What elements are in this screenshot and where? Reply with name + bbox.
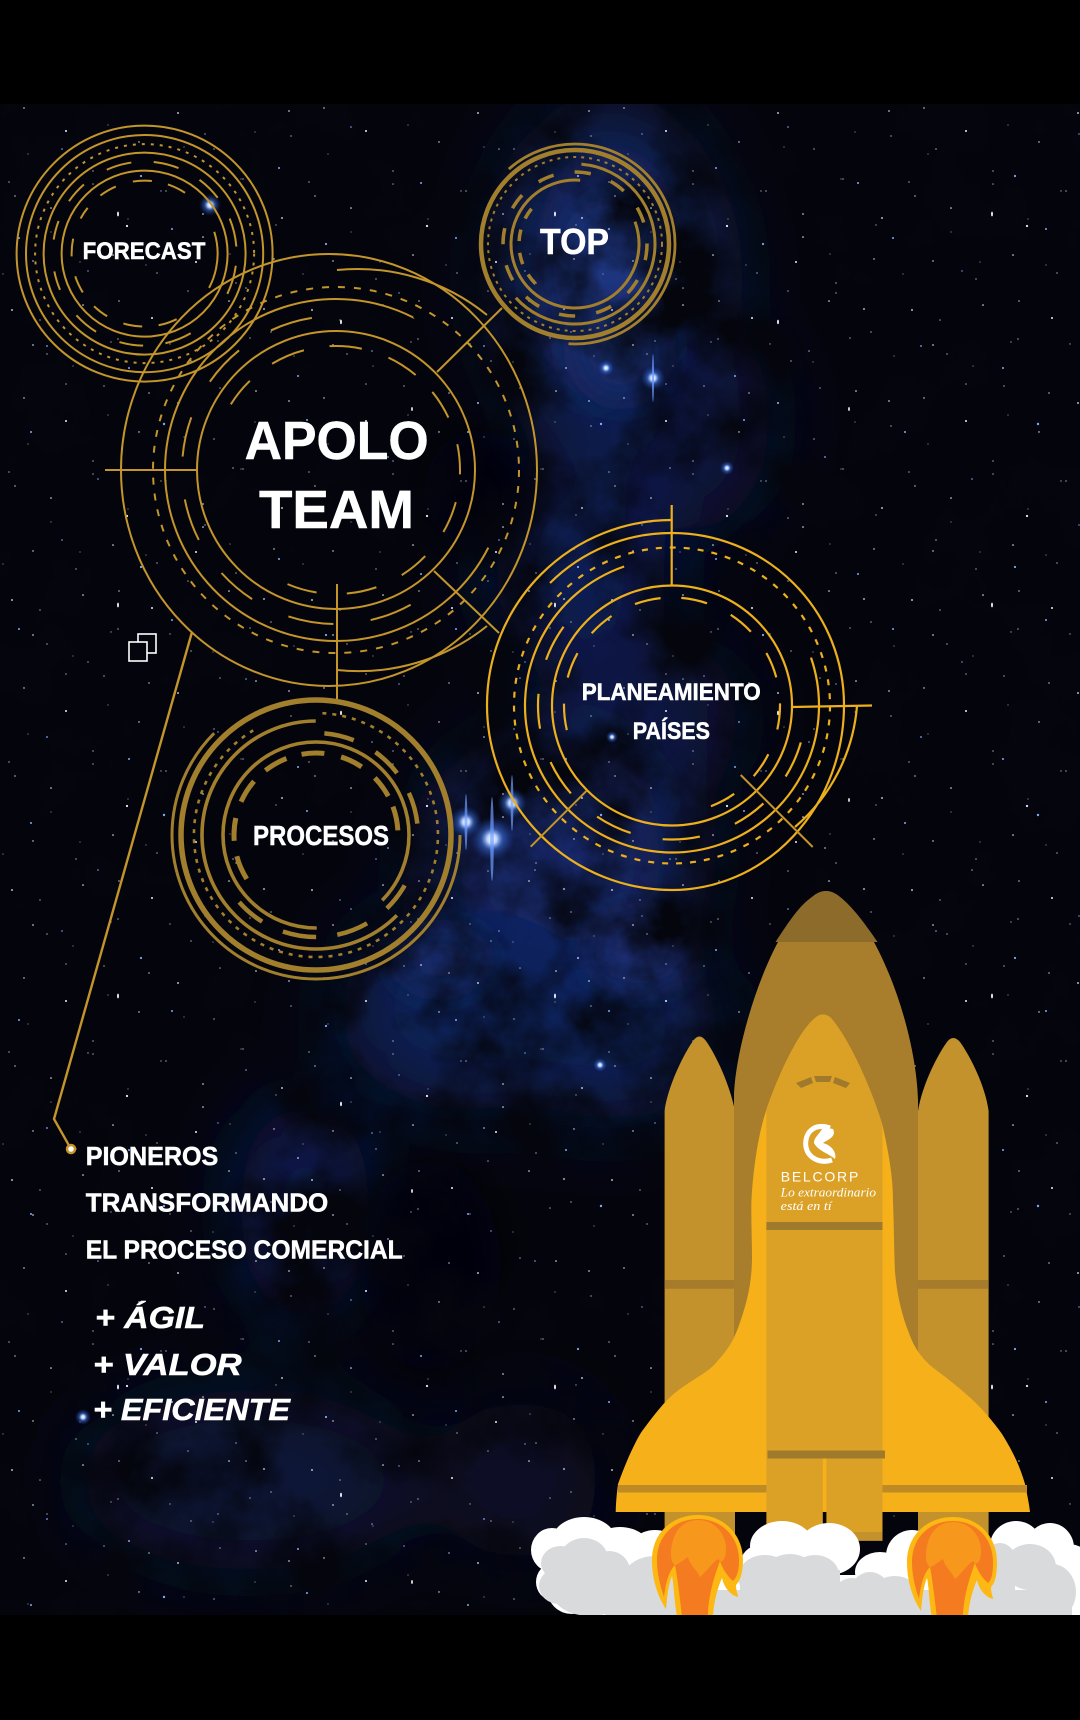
tick: right: [792, 706, 872, 707]
fuselage upper band: [766, 1222, 882, 1230]
text block: handwritten benefits: + ÁGIL: [95, 1300, 205, 1335]
logo: belcorp swirl: [806, 1126, 835, 1161]
label: forecast: FORECAST: [83, 238, 206, 265]
title: team: TEAM: [259, 480, 414, 540]
fuselage lower split: [823, 1458, 826, 1512]
text block: pioneros: PIONEROS: [86, 1141, 218, 1171]
circle: PROCESOS: [155, 674, 477, 996]
fuselage lower band: [768, 1450, 885, 1458]
logo: tagline line one: Lo extraordinario: [780, 1185, 876, 1200]
text block: pioneros: [86, 1141, 403, 1264]
fuselage bottom band: [766, 1532, 882, 1541]
connector: apolo to top: [437, 308, 502, 372]
flame: right engine: [907, 1517, 997, 1618]
tick: lower right: [741, 775, 813, 847]
text block: handwritten benefits: + EFICIENTE: [93, 1392, 291, 1427]
flame: left engine: [652, 1515, 743, 1616]
tick: left: [105, 469, 197, 471]
text block: pioneros: EL PROCESO COMERCIAL: [86, 1234, 403, 1264]
central tank nose: [776, 891, 878, 942]
leader line to text block: [54, 632, 192, 1153]
label: planeamiento: PLANEAMIENTO: [582, 679, 761, 706]
top black band: [0, 0, 1080, 104]
gap under split: [823, 1512, 826, 1524]
tick: lower left: [531, 791, 587, 847]
circle: TOP: [434, 103, 716, 385]
connector: apolo to planeamiento: [434, 571, 499, 633]
circle: PLANEAMIENTO PAISES: [485, 505, 872, 892]
label: top: TOP: [540, 221, 609, 262]
text block: handwritten benefits: [93, 1300, 291, 1427]
leader endpoint dot: [67, 1145, 75, 1153]
booster bands: [665, 1280, 989, 1289]
orbiter wings: [616, 1014, 1030, 1512]
logo: belcorp wordmark: BELCORP: [781, 1169, 858, 1185]
circle: FORECAST: [17, 126, 273, 382]
cloud outline white: [531, 1517, 1080, 1615]
rocket: space shuttle: [616, 891, 1030, 1545]
label: procesos: PROCESOS: [253, 820, 389, 851]
icon: copy squares: [129, 634, 156, 661]
text block: handwritten benefits: + VALOR: [93, 1347, 242, 1382]
smoke clouds: [531, 1517, 1080, 1620]
bright stars: [75, 194, 734, 1425]
orbiter fuselage: [766, 1014, 882, 1541]
cockpit windows: [796, 1076, 850, 1088]
wing stripes: [618, 1485, 1027, 1492]
right booster: [918, 1038, 989, 1545]
title: apolo: APOLO: [245, 411, 429, 471]
logo: tagline line two: está en tí: [781, 1198, 833, 1213]
left booster: [665, 1036, 735, 1545]
tick: top: [671, 505, 673, 586]
central tank: [734, 891, 918, 1500]
connector: apolo to procesos: [336, 584, 338, 701]
text block: pioneros: TRANSFORMANDO: [86, 1188, 328, 1218]
bottom black band: [0, 1615, 1080, 1720]
circle: APOLO TEAM: [105, 240, 566, 701]
cloud fill gray: [539, 1538, 1076, 1620]
label: paises: PAÍSES: [633, 717, 710, 745]
